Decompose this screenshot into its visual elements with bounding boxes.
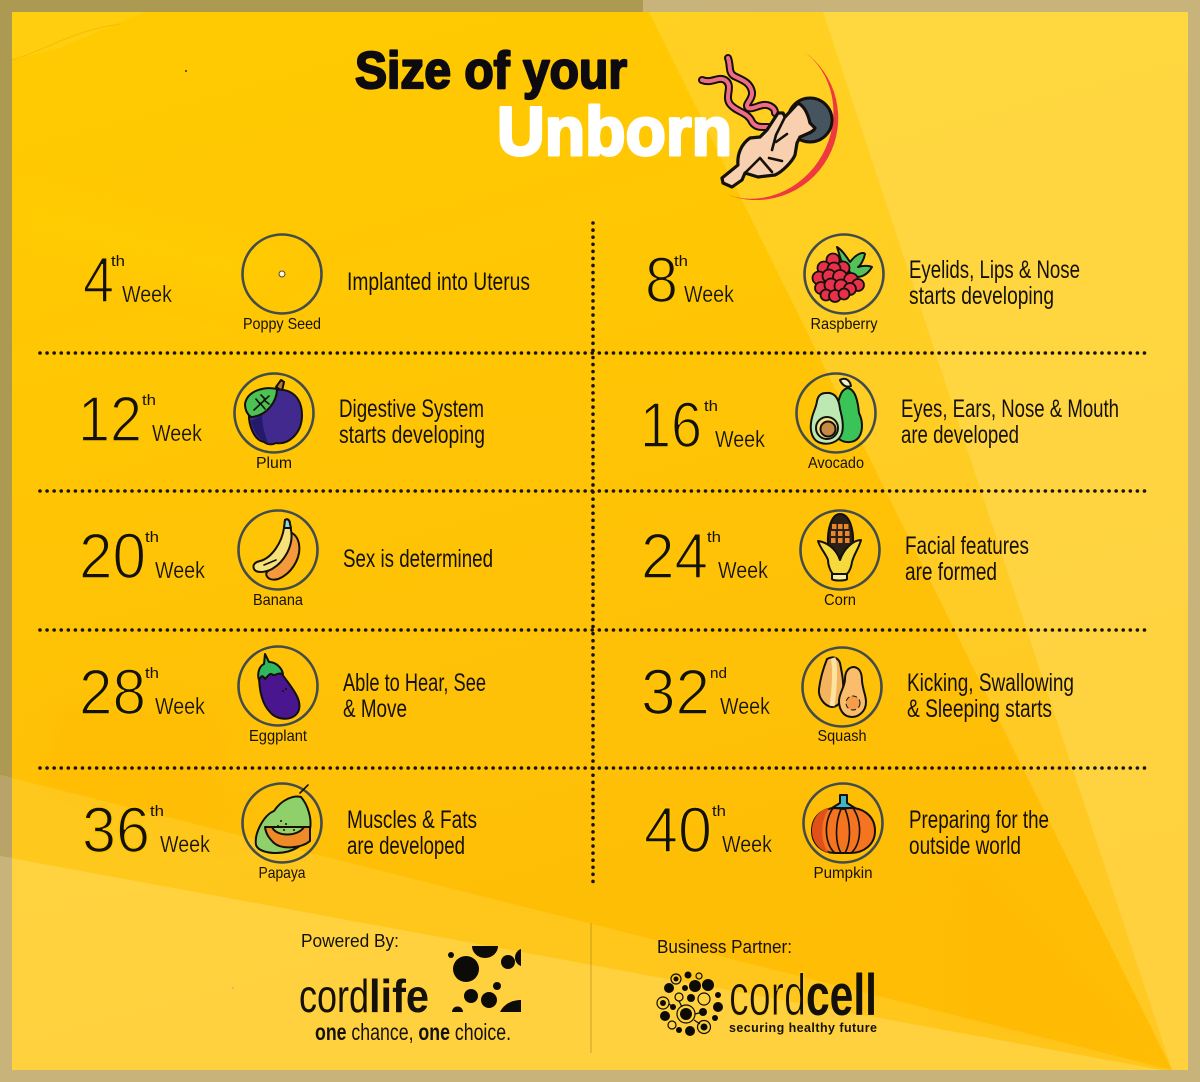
- label: Squash: Squash: [818, 728, 866, 745]
- description: are developed: [901, 421, 1019, 449]
- icon: papaya: [242, 784, 322, 862]
- description: starts developing: [909, 282, 1054, 310]
- week number: 28th week: Week: [155, 693, 205, 719]
- label: Plum: Plum: [256, 455, 292, 472]
- week number: 12th week: th: [142, 392, 156, 409]
- week number: 36th week: [82, 794, 210, 866]
- logo mark: cordcell cell cluster: [657, 972, 723, 1036]
- logo: cordlife: [299, 946, 521, 1045]
- title line: Size of your: Size of your: [355, 42, 627, 100]
- week number: 24th week: th: [707, 529, 721, 546]
- logo: cordcell: [657, 963, 877, 1036]
- description: [905, 532, 1029, 586]
- row: week 16: [640, 374, 1119, 472]
- row: week 28: [79, 646, 486, 745]
- description: Muscles & Fats: [347, 806, 477, 834]
- week number: 20th week: 20: [79, 520, 146, 592]
- description: outside world: [909, 832, 1021, 860]
- description: Eyelids, Lips & Nose: [909, 256, 1080, 284]
- week number: 4th week: 4: [83, 244, 114, 316]
- label: Poppy Seed: Poppy Seed: [243, 316, 321, 333]
- week number: 16th week: th: [704, 398, 718, 415]
- divider: vertical dotted line: [591, 223, 595, 886]
- icon: banana: [238, 510, 318, 590]
- description: Digestive System: [339, 395, 484, 423]
- week number: 24th week: [641, 520, 768, 592]
- label: Avocado: Avocado: [808, 455, 864, 472]
- week number: 16th week: [640, 389, 765, 461]
- footer: Powered By label: Powered By:: [301, 931, 399, 951]
- divider: horizontal dotted line 4: [40, 766, 1146, 770]
- description: & Sleeping starts: [907, 695, 1052, 723]
- description: & Move: [343, 695, 407, 723]
- title: [355, 42, 732, 170]
- icon: eggplant: [238, 646, 318, 726]
- description: [909, 806, 1049, 860]
- background: second light wedge, right side: [819, 0, 1200, 1082]
- tagline: one chance, one choice.: one chance, one choice.: [315, 1019, 511, 1045]
- week number: 12th week: [78, 383, 202, 455]
- row: week 32: [641, 648, 1074, 745]
- description: are developed: [347, 832, 465, 860]
- week number: 32nd week: [641, 656, 770, 728]
- icon: poppy seed: [242, 234, 322, 314]
- label: Raspberry: Raspberry: [810, 316, 878, 333]
- row: week 20: [79, 510, 493, 609]
- label: Pumpkin: Pumpkin: [814, 865, 872, 882]
- week number: 4th week: [83, 244, 172, 316]
- row: week 40: [644, 784, 1049, 882]
- label: Papaya: Papaya: [258, 865, 306, 882]
- description: Facial features: [905, 532, 1029, 560]
- week number: 16th week: Week: [715, 426, 765, 452]
- background: lower light band, bottom: [0, 856, 1200, 1082]
- divider: horizontal dotted line 2: [40, 489, 1146, 493]
- week number: 32nd week: nd: [710, 665, 727, 682]
- row: week 24: [641, 510, 1029, 609]
- tagline: securing healthy future: securing healthy future: [729, 1021, 877, 1035]
- week number: 24th week: 24: [641, 520, 708, 592]
- description: [339, 395, 485, 449]
- description: Able to Hear, See: [343, 669, 486, 697]
- logo mark: cordlife dots: [448, 946, 521, 1012]
- description: Sex is determined: [343, 545, 493, 573]
- background: upper light band, bottom: [0, 775, 1200, 1082]
- week number: 12th week: Week: [152, 420, 202, 446]
- title line: Unborn: Unborn: [497, 93, 732, 170]
- description: Implanted into Uterus: [347, 268, 530, 296]
- week number: 28th week: th: [145, 665, 159, 682]
- week number: 24th week: Week: [718, 557, 768, 583]
- row: week 4: [83, 234, 530, 333]
- week number: 28th week: 28: [79, 656, 146, 728]
- week number: 40th week: [644, 794, 772, 866]
- week number: 36th week: th: [150, 803, 164, 820]
- week number: 40th week: th: [712, 803, 726, 820]
- week number: 40th week: Week: [722, 831, 772, 857]
- row: week 8: [645, 234, 1080, 333]
- icon: plum: [234, 374, 314, 452]
- description: Preparing for the: [909, 806, 1049, 834]
- label: Corn: Corn: [824, 592, 856, 609]
- week number: 20th week: Week: [155, 557, 205, 583]
- week number: 32nd week: 32: [641, 656, 710, 728]
- icon: squash: [802, 648, 882, 726]
- footer: Business Partner label: Business Partner:: [657, 937, 792, 957]
- description: [901, 395, 1119, 449]
- week number: 8th week: 8: [645, 244, 678, 316]
- week number: 4th week: th: [111, 253, 125, 270]
- description: [907, 669, 1074, 723]
- divider: horizontal dotted line 1: [40, 351, 1146, 355]
- wordmark: cordcell: cordcell: [729, 963, 877, 1028]
- week number: 8th week: [645, 244, 734, 316]
- week number: 32nd week: Week: [720, 693, 770, 719]
- description: [343, 669, 486, 723]
- icon: corn: [800, 510, 880, 590]
- description: starts developing: [339, 421, 485, 449]
- week number: 28th week: [79, 656, 205, 728]
- description: [909, 256, 1080, 310]
- description: are formed: [905, 558, 997, 586]
- description: Eyes, Ears, Nose & Mouth: [901, 395, 1119, 423]
- week number: 20th week: [79, 520, 205, 592]
- icon: raspberry: [804, 234, 884, 314]
- week number: 40th week: 40: [644, 794, 712, 866]
- week number: 8th week: Week: [684, 281, 734, 307]
- label: Banana: Banana: [253, 592, 303, 609]
- description: [347, 806, 477, 860]
- footer divider: [590, 923, 592, 1053]
- week number: 16th week: 16: [640, 389, 702, 461]
- week number: 4th week: Week: [122, 281, 172, 307]
- week number: 36th week: Week: [160, 831, 210, 857]
- icon: pumpkin: [804, 784, 882, 862]
- icon: fetus with DNA strand and red crescent: [702, 50, 838, 200]
- background: light diagonal wedge, right side: [643, 0, 1200, 1082]
- row: week 12: [78, 374, 485, 472]
- week number: 12th week: 12: [78, 383, 142, 455]
- week number: 20th week: th: [145, 529, 159, 546]
- week number: 8th week: th: [674, 253, 688, 270]
- wordmark: cordlife: cordlife: [299, 970, 429, 1022]
- row: week 36: [82, 784, 477, 882]
- week number: 36th week: 36: [82, 794, 150, 866]
- icon: avocado: [796, 374, 876, 452]
- description: Kicking, Swallowing: [907, 669, 1074, 697]
- label: Eggplant: Eggplant: [249, 728, 308, 745]
- divider: horizontal dotted line 3: [40, 628, 1146, 632]
